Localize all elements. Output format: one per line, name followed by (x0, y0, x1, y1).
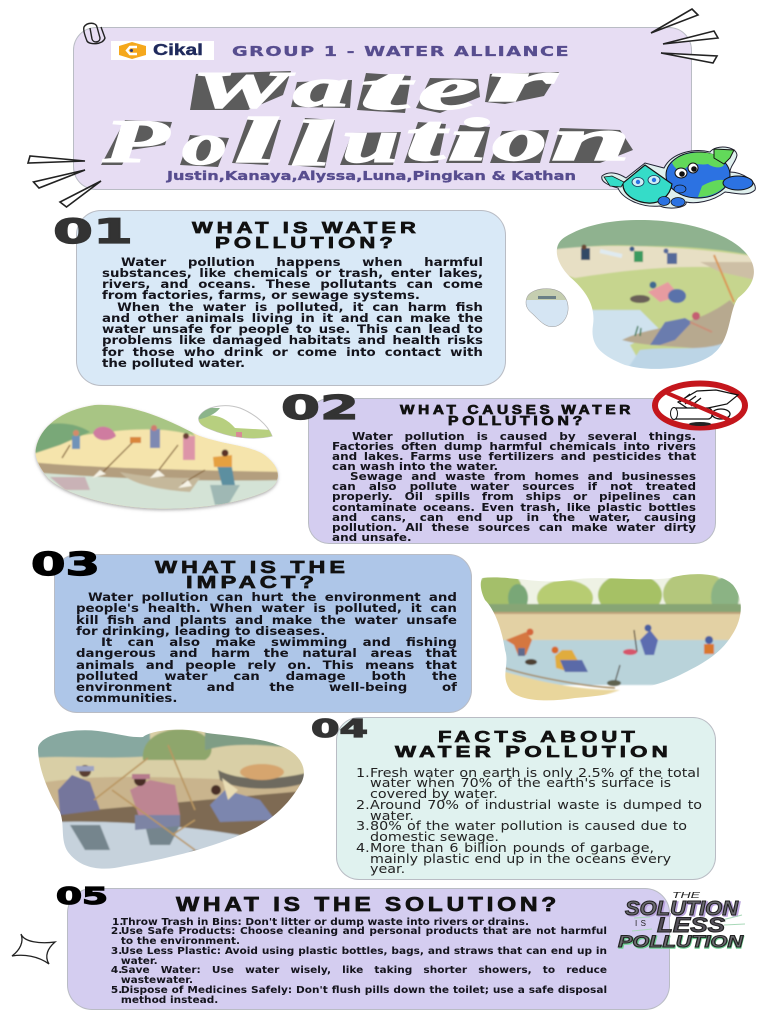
text: definition paragraphs: rivers, and oceans. These pollutants can come (102, 277, 483, 291)
list: solutions: 3. (111, 946, 122, 957)
text: definition paragraphs: substances, like chemicals or trash, enter lakes, (102, 266, 483, 280)
list: facts: 80% of the water pollution is caused due to (370, 819, 687, 833)
list: solutions: 1. (112, 916, 123, 928)
icon: paperclip (83, 22, 106, 44)
text: impact paragraphs: animals and people rely on. This means that (76, 658, 457, 672)
text: impact paragraphs: polluted water can damage both the (76, 669, 457, 683)
text: causes paragraphs: Sewage and waste from homes and businesses (349, 470, 696, 483)
text: causes paragraphs: and unsafe. (332, 531, 411, 544)
list: facts: water. (370, 808, 414, 822)
list: solutions: method instead. (121, 994, 218, 1006)
text: definition paragraphs: water unsafe for people to use. This can lead to (102, 322, 483, 336)
number: 02: 02 (281, 388, 359, 427)
title: Water: W (192, 62, 296, 119)
list: facts (356, 766, 702, 876)
heading: what is water pollution: WHAT IS WATER (192, 220, 420, 237)
illustration: women sweeping on riverbank, blob shape (34, 404, 280, 512)
title: Water: a (293, 57, 349, 118)
title: Pollution: P (101, 109, 170, 176)
title: Water: e (418, 56, 478, 123)
list: facts: 4. (356, 841, 370, 855)
list: solutions: Throw Trash in Bins: Don't litter or dump waste into rivers or drains. (121, 916, 529, 928)
text: causes paragraphs: and lakes. Farms use fertilizers and pesticides that (332, 450, 696, 463)
badge: the solution is less pollution: POLLUTION (619, 933, 744, 952)
logo: Cikal: Cikal (153, 42, 203, 59)
list: solutions: to the environment. (121, 936, 240, 947)
heading: facts about water pollution: WATER POLLUTION (395, 744, 672, 761)
title: Pollution (101, 101, 633, 180)
heading: what is the impact: IMPACT? (186, 572, 318, 592)
list: facts: water when 70% of the earth's surface is (370, 776, 671, 790)
title: Pollution: n (551, 107, 631, 174)
icon: four-point star outline (12, 934, 57, 964)
panel: facts about water pollution (337, 718, 715, 879)
panel: what is water pollution (77, 211, 505, 385)
text: causes paragraphs (332, 430, 696, 544)
text: causes paragraphs: pollution. All these sources can make water dirty (332, 521, 696, 534)
text: definition paragraphs: When the water is polluted, it can harm fish (117, 300, 483, 314)
list: facts: More than 6 billion pounds of garbage, (370, 841, 654, 855)
list: solutions: Use Safe Products: Choose cleaning and personal products that are not harmful (121, 926, 607, 937)
text: definition paragraphs: the polluted water. (102, 356, 245, 370)
text: causes paragraphs: Factories often dump harmful chemicals into rivers (332, 440, 696, 453)
text: definition paragraphs: from factories, farms, or sewage systems. (102, 288, 420, 302)
title: Water: t (359, 56, 415, 123)
panel: what is the impact (55, 555, 471, 712)
number: 01: 01 (53, 212, 133, 252)
logo: Cikal (111, 41, 214, 60)
list: solutions: Dispose of Medicines Safely: Don't flush pills down the toilet; use a safe disposal (121, 985, 607, 996)
heading: facts about water pollution (394, 729, 672, 761)
title: Pollution: l (234, 105, 278, 177)
list: facts: 3. (356, 819, 370, 833)
text: causes paragraphs: properly. Oil spills from ships or pipelines can (332, 490, 696, 503)
heading: what is the solution: WHAT IS THE SOLUTION? (176, 894, 560, 916)
number: 03: 03 (31, 545, 100, 583)
text: impact paragraphs: kill fish and plants and make the water unsafe (76, 613, 457, 627)
title: Pollution: i (447, 107, 489, 174)
list: facts: 1. (356, 766, 370, 780)
list: facts: Around 70% of industrial waste is dumped to (370, 798, 702, 812)
list: facts: 2. (356, 798, 370, 812)
title: Pollution: o (182, 111, 227, 177)
subtitle: group name: GROUP 1 - WATER ALLIANCE (232, 45, 570, 60)
text: definition paragraphs: problems like damaged habitats and health risks (102, 333, 483, 347)
text: definition paragraphs: and other animals living in it and can make the (102, 311, 483, 325)
text: impact paragraphs: people's health. When water is polluted, it can (76, 601, 457, 615)
list: facts: domestic sewage. (370, 830, 499, 844)
list: solutions: water. (121, 956, 158, 966)
title: Pollution: u (342, 109, 399, 176)
title: Pollution: l (290, 108, 333, 180)
title: Pollution: t (405, 101, 450, 175)
list: facts: mainly plastic end up in the oceans every (370, 852, 671, 866)
list: facts: year. (370, 862, 405, 876)
text: impact paragraphs: dangerous and harm the natural areas that (76, 646, 457, 660)
icon: burst lines left (27, 155, 102, 208)
text: causes paragraphs: can also pollute water sources if not treated (332, 480, 696, 493)
illustration: workers by river, blob shape (556, 220, 754, 369)
panel: what is the solution (68, 889, 669, 1009)
heading: what is water pollution: POLLUTION? (215, 235, 397, 252)
badge: the solution is less pollution: SOLUTION (625, 898, 739, 920)
icon: burst lines top right (650, 8, 720, 64)
list: solutions: 4. (111, 965, 122, 976)
badge: the solution is less pollution: SOLUTION (626, 899, 740, 921)
badge: the solution is less pollution: IS (635, 919, 646, 928)
panel: what causes water pollution (309, 399, 715, 543)
illustration: people working in a river with trees, blob shape (480, 574, 741, 700)
text: impact paragraphs: for drinking, leading to diseases. (76, 624, 325, 638)
text: definition paragraphs: Water pollution happens when harmful (121, 255, 483, 269)
list: solutions: 2. (111, 926, 122, 937)
list: solutions (111, 916, 607, 1006)
illustration: fishermen in a river, blob shape (38, 730, 304, 869)
badge: the solution is less pollution (618, 890, 745, 952)
list: solutions: Use Less Plastic: Avoid using plastic bottles, bags, and straws that can end up in (121, 946, 607, 957)
icon: no littering sign (652, 380, 748, 430)
text: causes paragraphs: contaminate oceans. Even trash, like plastic bottles (332, 501, 696, 514)
badge: the solution is less pollution: POLLUTION (618, 932, 744, 951)
text: definition paragraphs: for those who drink or come into contact with (102, 345, 483, 359)
illustration: small water droplet (526, 288, 568, 327)
badge: the solution is less pollution: LESS (657, 914, 725, 937)
text: causes paragraphs: and cans, can end up in the water, causing (332, 511, 696, 524)
panel: header background (74, 28, 691, 189)
title: Water: r (487, 48, 559, 114)
title: Water (190, 48, 560, 123)
title: Pollution: o (492, 107, 547, 174)
heading: what is the impact: WHAT IS THE (155, 557, 349, 577)
heading: what causes water pollution (400, 403, 634, 428)
heading: what causes water pollution: WHAT CAUSES WATER (400, 403, 634, 417)
list: solutions: 5. (111, 985, 122, 996)
text: definition paragraphs (102, 255, 483, 370)
list: solutions: Save Water: Use water wisely, like taking shorter showers, to reduce (121, 965, 607, 976)
list: facts: covered by water. (370, 787, 498, 801)
heading: what is water pollution (191, 220, 420, 252)
text: causes paragraphs: can wash into the water. (332, 460, 498, 473)
text: team member names: Justin,Kanaya,Alyssa,Luna,Pingkan & Kathan (166, 169, 576, 183)
icon: earth and water drop mascots (601, 146, 756, 209)
heading: what causes water pollution: POLLUTION? (448, 414, 586, 428)
badge: the solution is less pollution: THE (672, 890, 701, 900)
list: solutions: wastewater. (121, 975, 193, 986)
text: impact paragraphs: environment and the well-being of (76, 680, 457, 694)
heading: facts about water pollution: FACTS ABOUT (438, 729, 639, 746)
number: 05: 05 (56, 884, 108, 910)
illustration: small oval landscape piece (198, 405, 272, 439)
text: impact paragraphs: It can also make swimming and fishing (101, 635, 457, 649)
text: impact paragraphs: communities. (76, 691, 177, 705)
text: impact paragraphs (76, 590, 458, 705)
list: facts: Fresh water on earth is only 2.5% of the total (370, 766, 700, 780)
text: causes paragraphs: Water pollution is caused by several things. (351, 430, 696, 442)
heading: what is the impact (154, 557, 349, 592)
number: 04: 04 (311, 714, 368, 743)
text: impact paragraphs: Water pollution can hurt the environment and (88, 590, 457, 604)
